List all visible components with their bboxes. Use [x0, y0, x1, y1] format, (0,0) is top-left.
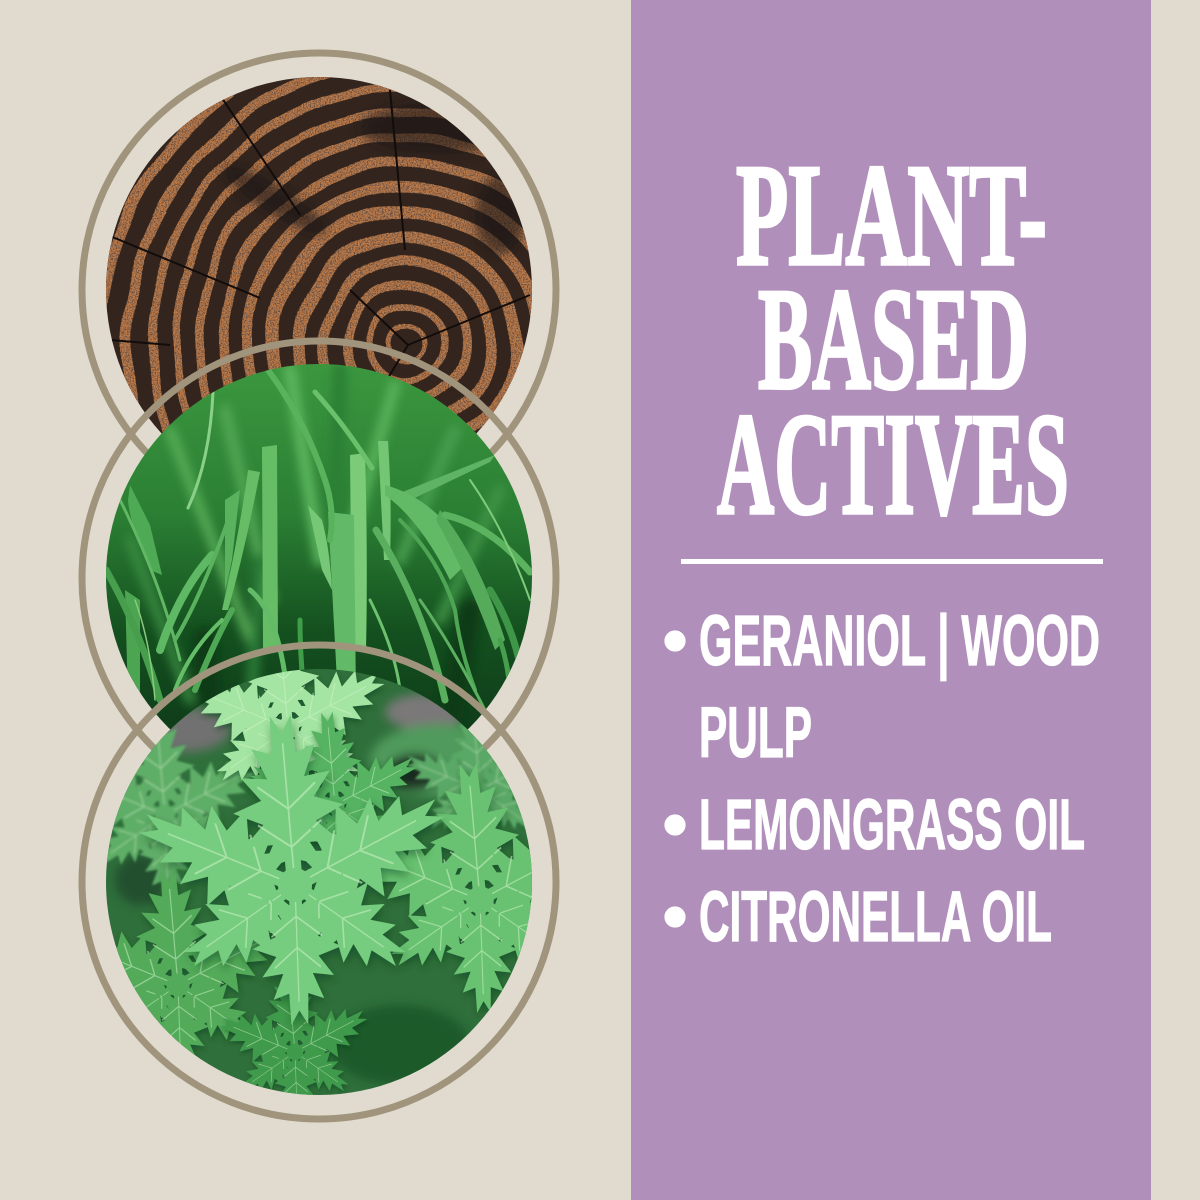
leaf: bottom: [220, 974, 367, 1095]
title: [717, 134, 1069, 545]
dark burn patches: [217, 102, 525, 255]
ring: wood: [82, 53, 556, 527]
thin curved blades: [106, 370, 530, 720]
shadowed background: [115, 694, 510, 1085]
list item: geraniol wood pulp: PULP: [699, 694, 812, 773]
photo: citronella leaves: [106, 669, 532, 1095]
blurred background stems: [130, 370, 500, 720]
leaf: background left: [107, 728, 255, 896]
leaf: background right: [406, 724, 525, 829]
photo: lemongrass: [106, 364, 532, 730]
wood cracks: [110, 90, 530, 378]
sharp grass blades: [125, 441, 505, 700]
leaf: middle: [250, 712, 416, 851]
list item: geraniol wood pulp: [665, 602, 1100, 773]
ring: leaves: [82, 645, 556, 1119]
title divider: [681, 559, 1103, 564]
photo: wood rings: [106, 77, 532, 434]
ring: grass: [82, 341, 556, 815]
leaf: large centre: [140, 714, 446, 1029]
leaf: pale top: [200, 670, 384, 784]
ingredient list: [665, 602, 1100, 957]
panel: purple title column: [631, 0, 1151, 1200]
list item: citronella oil: [665, 878, 1052, 957]
leaf: lower left: [116, 870, 272, 1056]
leaf: right: [380, 763, 532, 1013]
